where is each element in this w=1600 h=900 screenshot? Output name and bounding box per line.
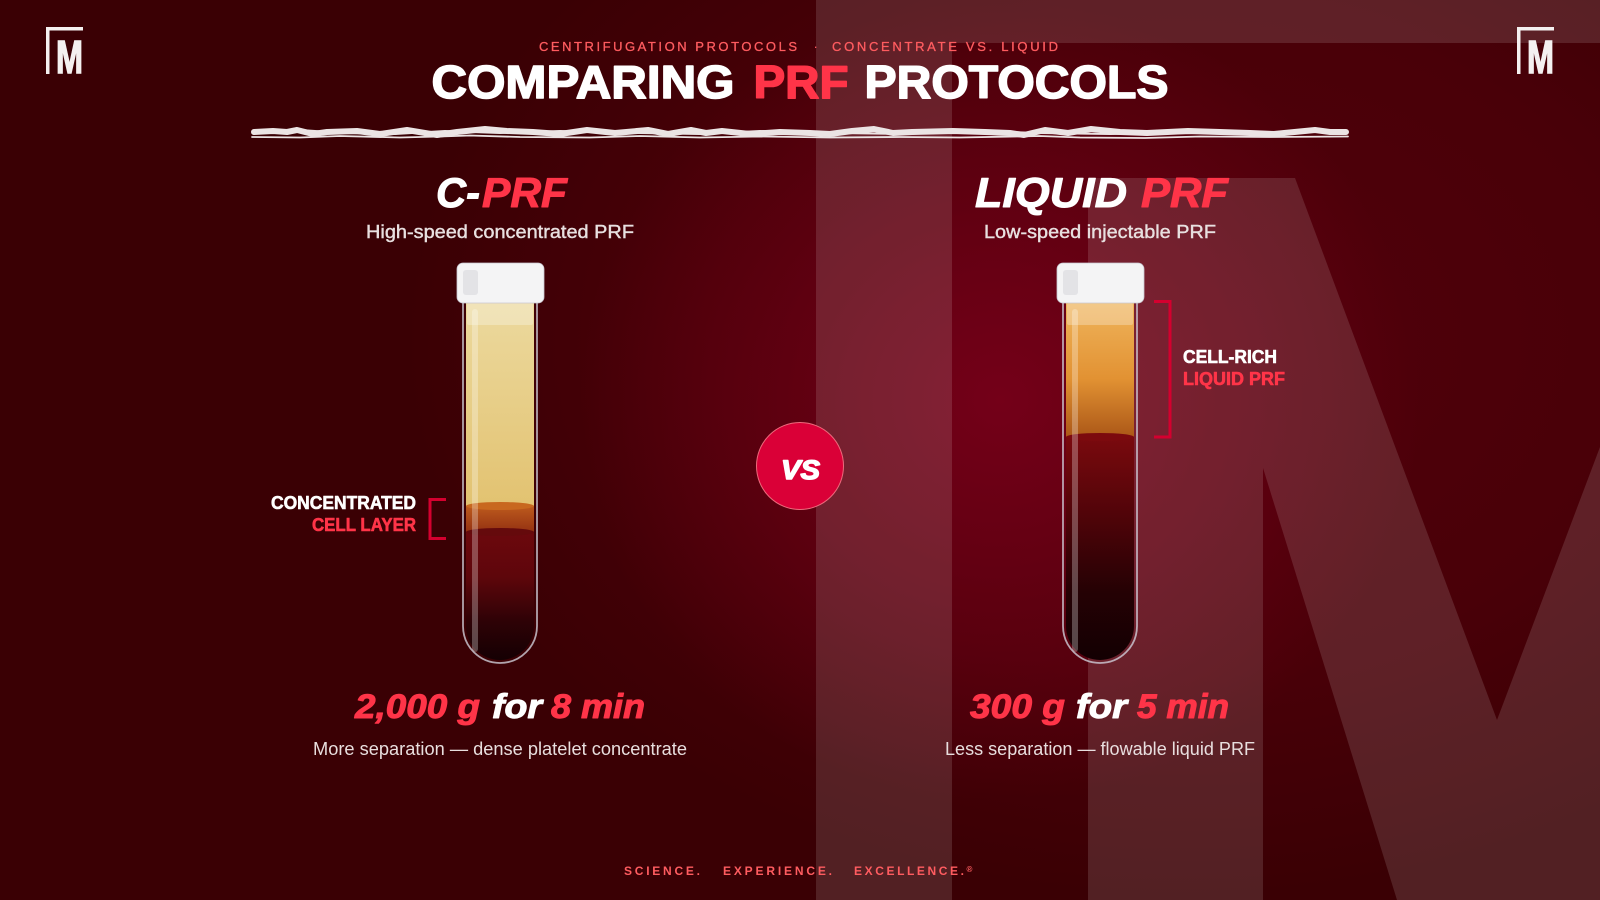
VS badge: VS bbox=[781, 455, 820, 485]
description: C-PRF: More separation — dense platelet concentrate bbox=[313, 739, 687, 759]
top glare bbox=[467, 303, 533, 325]
subtitle: Liquid PRF: Low-speed injectable PRF bbox=[984, 222, 1216, 242]
cap highlight bbox=[1063, 270, 1078, 295]
title bbox=[432, 56, 1168, 108]
test tube: Liquid PRF bbox=[1057, 263, 1144, 663]
title: COMPARING bbox=[432, 56, 734, 108]
side glare bbox=[472, 309, 478, 652]
callout: cell-rich liquid PRF bbox=[1183, 347, 1285, 389]
watermark: M logo bbox=[816, 0, 1600, 900]
stat: C-PRF settings: for bbox=[492, 688, 544, 726]
heading: Liquid PRF: LIQUID bbox=[975, 169, 1127, 217]
callout: cell-rich liquid PRF: CELL-RICH bbox=[1183, 347, 1277, 367]
eyebrow bbox=[539, 39, 1058, 54]
footer tagline: SCIENCE. bbox=[624, 864, 700, 878]
logo: top right bbox=[1517, 27, 1554, 83]
bracket: concentrated cell layer bbox=[430, 500, 446, 538]
stat: Liquid PRF settings: 300 g bbox=[970, 688, 1065, 726]
callout: cell-rich liquid PRF: LIQUID PRF bbox=[1183, 369, 1285, 389]
glass bbox=[463, 303, 537, 663]
liquid layers bbox=[1066, 303, 1134, 662]
callout: concentrated cell layer: CELL LAYER bbox=[312, 515, 416, 535]
stat: C-PRF settings bbox=[354, 688, 645, 726]
callout: concentrated cell layer: CONCENTRATED bbox=[271, 493, 416, 513]
rough divider bbox=[252, 129, 1348, 138]
footer tagline bbox=[624, 864, 972, 878]
cap highlight bbox=[463, 270, 478, 295]
eyebrow: · bbox=[814, 39, 818, 54]
logo: top right: M bbox=[1527, 31, 1554, 83]
heading: C-PRF: PRF bbox=[482, 169, 568, 216]
subtitle: C-PRF: High-speed concentrated PRF bbox=[366, 222, 634, 242]
stat: Liquid PRF settings: 5 min bbox=[1137, 688, 1229, 726]
top glare bbox=[1067, 303, 1133, 325]
VS badge bbox=[756, 422, 844, 510]
title: PROTOCOLS bbox=[864, 56, 1168, 108]
heading: C-PRF bbox=[436, 169, 568, 216]
side glare bbox=[1072, 309, 1078, 652]
logo: top left: M bbox=[56, 31, 83, 83]
callout: concentrated cell layer bbox=[271, 493, 416, 535]
footer tagline: EXPERIENCE. bbox=[723, 864, 832, 878]
eyebrow: CENTRIFUGATION PROTOCOLS bbox=[539, 39, 797, 54]
bracket: cell-rich liquid PRF bbox=[1154, 302, 1170, 437]
eyebrow: CONCENTRATE VS. LIQUID bbox=[832, 39, 1058, 54]
footer tagline: EXCELLENCE. bbox=[854, 864, 964, 878]
stat: Liquid PRF settings: for bbox=[1076, 688, 1129, 726]
heading: C-PRF: C- bbox=[436, 169, 480, 216]
liquid layers bbox=[466, 303, 534, 662]
cap bbox=[1057, 263, 1144, 303]
cap bbox=[457, 263, 544, 303]
glass bbox=[1063, 303, 1137, 663]
test tube: C-PRF bbox=[457, 263, 544, 663]
description: Liquid PRF: Less separation — flowable liquid PRF bbox=[945, 739, 1255, 759]
footer tagline: ® bbox=[966, 865, 972, 874]
logo: top left bbox=[46, 27, 83, 83]
stat: C-PRF settings: 8 min bbox=[551, 688, 645, 726]
stat: Liquid PRF settings bbox=[970, 688, 1229, 726]
stat: C-PRF settings: 2,000 g bbox=[354, 688, 480, 726]
heading: Liquid PRF: PRF bbox=[1141, 169, 1229, 216]
heading: Liquid PRF bbox=[975, 169, 1229, 217]
title: PRF bbox=[754, 56, 848, 108]
